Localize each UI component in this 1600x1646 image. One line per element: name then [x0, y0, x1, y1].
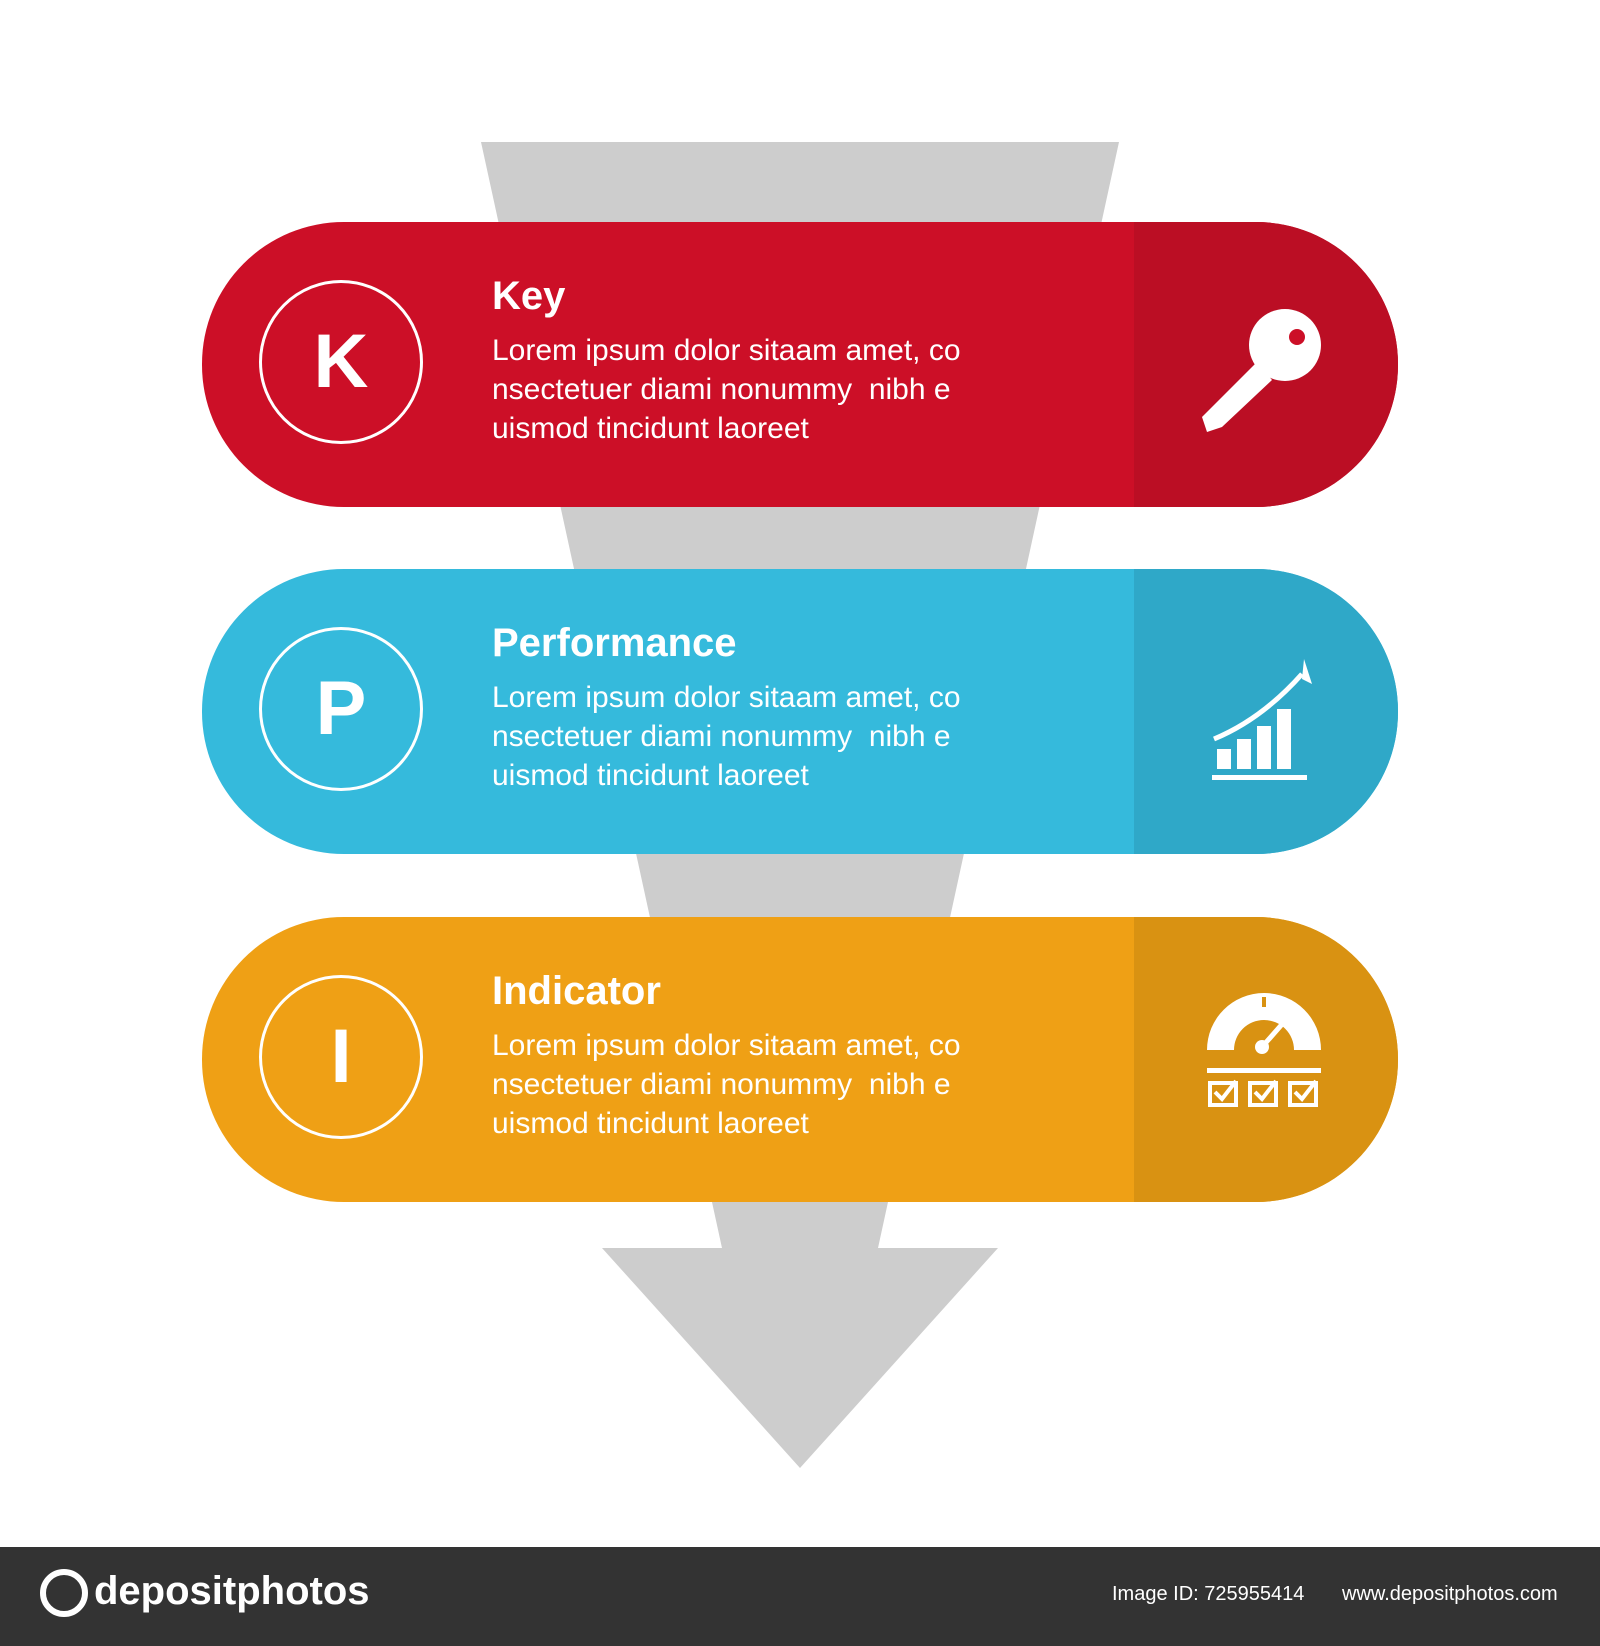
footer bar [0, 1547, 1600, 1646]
text: Key: nsectetuer diami nonummy nibh e [492, 373, 951, 406]
text: Key: Lorem ipsum dolor sitaam amet, co [492, 334, 961, 367]
text: Performance: Performance [492, 621, 737, 665]
text: Performance: uismod tincidunt laoreet [492, 759, 809, 792]
letter circle I: I [330, 1014, 352, 1099]
panel: Key [202, 222, 1398, 507]
letter circle P: P [316, 666, 366, 751]
text: Key: uismod tincidunt laoreet [492, 412, 809, 445]
text: Indicator: nsectetuer diami nonummy nibh e [492, 1068, 951, 1101]
icon: growth chart [1212, 659, 1312, 780]
panel: Performance [202, 569, 1398, 854]
footer logo: depositphotos [94, 1569, 370, 1613]
letter circle K: K [314, 319, 368, 404]
footer image id: Image ID: 725955414 [1112, 1583, 1304, 1605]
panel: Indicator [202, 917, 1398, 1202]
text: Indicator: Indicator [492, 969, 661, 1013]
letter circle K [259, 280, 423, 444]
text: Performance [492, 621, 961, 792]
letter circle P [259, 627, 423, 791]
text: Indicator: uismod tincidunt laoreet [492, 1107, 809, 1140]
text: Performance: Lorem ipsum dolor sitaam amet, co [492, 681, 961, 714]
footer url: www.depositphotos.com [1342, 1583, 1558, 1605]
text: Key [492, 274, 961, 445]
text: Indicator [492, 969, 961, 1140]
letter circle I [259, 975, 423, 1139]
text: Indicator: Lorem ipsum dolor sitaam amet, co [492, 1029, 961, 1062]
icon: key [1202, 309, 1321, 432]
icon: gauge with checks [1207, 993, 1321, 1107]
text: Key: Key [492, 274, 565, 318]
text: Performance: nsectetuer diami nonummy nibh e [492, 720, 951, 753]
